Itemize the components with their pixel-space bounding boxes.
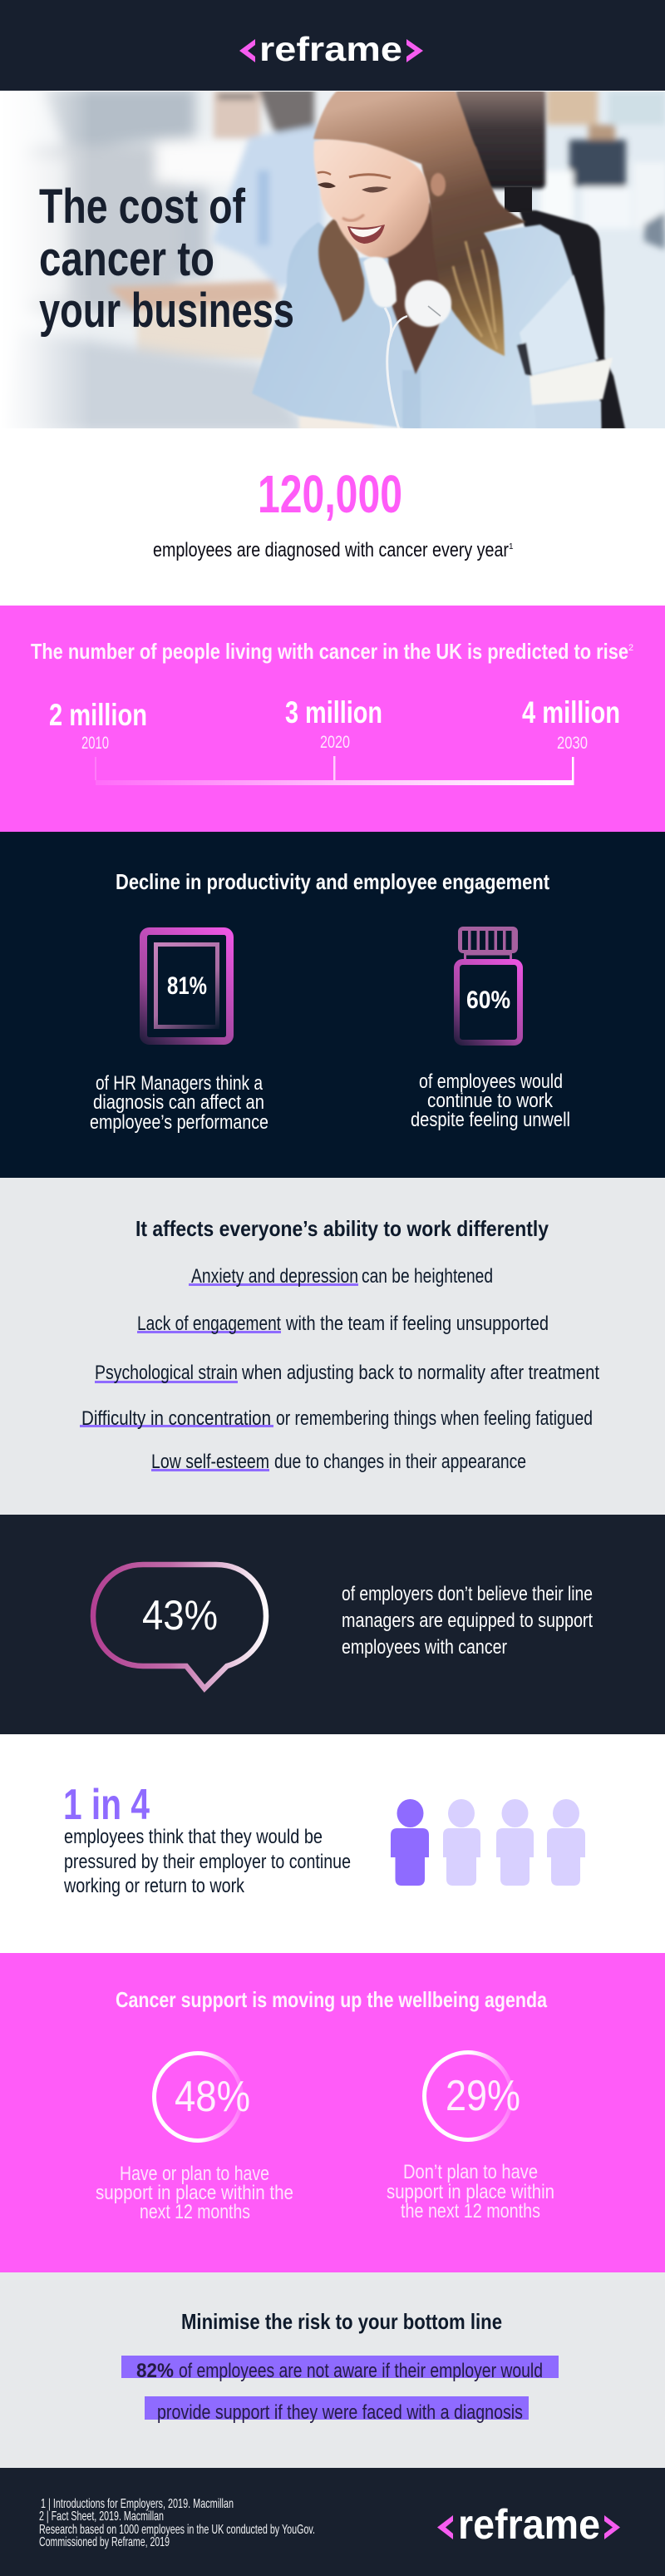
heading: Cancer support is moving up the wellbeing agenda: [116, 1987, 547, 2012]
logo: reframe: reframe: [458, 2501, 600, 2548]
headphones and cable: [363, 257, 451, 429]
hair: [313, 90, 526, 356]
value labels: 4 million: [522, 695, 620, 729]
panel: decline in productivity: [0, 832, 665, 1178]
text: don't plan: support in place within: [387, 2181, 554, 2203]
logo: reframe: [239, 30, 423, 68]
footnotes: Commissioned by Reframe, 2019: [39, 2535, 170, 2549]
text: have or plan: support in place within the: [96, 2182, 293, 2204]
shirt placket: [402, 370, 421, 430]
footnotes: Research based on 1000 employees in the UK conducted by YouGov.: [39, 2523, 315, 2537]
value labels: [49, 695, 620, 732]
office chair: [455, 88, 625, 429]
header bar with logo: [0, 0, 665, 91]
background office: blurred colleagues, desk and monitor: [0, 87, 665, 433]
panel: wellbeing agenda: [0, 1953, 665, 2272]
text: HR managers: employee’s performance: [90, 1111, 268, 1134]
list item: strain: [95, 1362, 599, 1384]
footer: [0, 2468, 665, 2576]
logo: reframe: reframe: [259, 30, 402, 68]
text: employers: of employers don’t believe their line: [342, 1583, 593, 1605]
hair highlight strands: [453, 241, 497, 349]
big stat: 1 in 4: [63, 1781, 150, 1829]
icon: speech bubble 43%: [93, 1565, 266, 1688]
text: have or plan: Have or plan to have: [120, 2163, 269, 2185]
text: have or plan: next 12 months: [140, 2201, 250, 2223]
hero title: The cost of: [39, 180, 246, 234]
text: have or plan: [96, 2163, 293, 2223]
ring chart: 29%: 29%: [446, 2072, 520, 2120]
shirt sleeve and cuff: [517, 274, 613, 429]
list item: anxiety: Anxiety and depression: [191, 1265, 358, 1288]
footnotes: 1 | Introductions for Employers, 2019. Macmillan: [41, 2497, 234, 2511]
text: employees: of employees would: [419, 1070, 563, 1093]
stat description: employees are diagnosed with cancer every year: [153, 539, 509, 561]
heading: Decline in productivity and employee engagement: [116, 869, 549, 894]
panel: ability to work: [0, 1178, 665, 1515]
year labels: 2020: [320, 733, 350, 752]
timeline bar: [95, 756, 574, 785]
icon: speech bubble 43%: 43%: [142, 1592, 218, 1639]
left white fade: [0, 91, 82, 428]
description: working or return to work: [63, 1875, 245, 1897]
highlight line 1: [121, 2356, 559, 2382]
big number: 120,000: [258, 464, 402, 524]
text: HR managers: [90, 1072, 268, 1134]
list item: strain: when adjusting back to normality after treatment: [241, 1362, 599, 1384]
highlight line 2: provide support if they were faced with a diagnosis: [157, 2401, 523, 2424]
panel: 1 in 4: [0, 1734, 665, 1953]
panel: minimise the risk: [0, 2272, 665, 2468]
eyes, nose and smile: [318, 172, 391, 244]
list item: anxiety: [189, 1265, 493, 1288]
list item: engagement: Lack of engagement: [137, 1313, 281, 1335]
heading: It affects everyone’s ability to work differently: [135, 1216, 549, 1241]
text: don't plan: Don’t plan to have: [403, 2161, 538, 2183]
year labels: 2010: [81, 734, 109, 753]
description: employees think that they would be: [64, 1826, 323, 1848]
face: [313, 140, 430, 259]
hero photo: smiling woman at office desk: [0, 87, 665, 433]
icon: pill bottle 60%: 60%: [466, 986, 510, 1014]
panel: people living with cancer timeline: [0, 606, 665, 832]
panel: line managers: [0, 1515, 665, 1734]
list item: self-esteem: [151, 1451, 526, 1473]
footnotes: [39, 2497, 315, 2549]
text: employees: despite feeling unwell: [411, 1109, 570, 1131]
list item: self-esteem: due to changes in their appearance: [274, 1451, 526, 1473]
woman's shirt: [252, 222, 601, 429]
ear: [431, 173, 446, 196]
list item: self-esteem: Low self-esteem: [151, 1451, 269, 1473]
ring chart: 48%: [155, 2053, 250, 2141]
text: HR managers: of HR Managers think a: [96, 1072, 264, 1095]
icon: document frame 81%: [143, 932, 229, 1041]
list item: concentration: [80, 1407, 593, 1430]
list item: concentration: Difficulty in concentration: [81, 1407, 271, 1430]
text: don't plan: [387, 2161, 554, 2222]
highlight line 1: 82%: [136, 2360, 174, 2382]
list item: strain: Psychological strain: [95, 1362, 238, 1384]
text: employers: managers are equipped to support: [342, 1609, 593, 1632]
heading: 2: [628, 643, 633, 653]
list item: engagement: [137, 1313, 549, 1335]
hero title: your business: [39, 284, 294, 338]
hero title: [39, 180, 294, 338]
text: employers: employees with cancer: [342, 1636, 507, 1659]
chest and neck: [384, 201, 441, 375]
stat description: 1: [509, 542, 514, 551]
footnotes: 2 | Fact Sheet, 2019. Macmillan: [39, 2509, 164, 2524]
text: employers: [342, 1583, 593, 1659]
list item: anxiety: can be heightened: [362, 1265, 493, 1288]
text: HR managers: diagnosis can affect an: [93, 1091, 264, 1114]
year labels: 2030: [557, 734, 588, 753]
text: don't plan: the next 12 months: [401, 2200, 540, 2222]
description: pressured by their employer to continue: [64, 1851, 351, 1873]
text: employees: [411, 1070, 570, 1131]
icon: four people: [391, 1799, 585, 1886]
icon: document frame 81%: 81%: [167, 972, 207, 1000]
left lock of hair: [318, 218, 364, 322]
year labels: [81, 733, 588, 753]
highlight line 2: [145, 2396, 529, 2424]
list item: engagement: with the team if feeling unsupported: [285, 1313, 549, 1335]
panel: 120,000 employees stat: [0, 429, 665, 606]
description: [63, 1826, 351, 1897]
text: employees: continue to work: [427, 1090, 554, 1112]
ring chart: 48%: 48%: [175, 2073, 250, 2121]
value labels: 2 million: [49, 698, 147, 732]
value labels: 3 million: [285, 695, 382, 729]
list item: concentration: or remembering things when feeling fatigued: [276, 1407, 593, 1430]
highlight line 1: of employees are not aware if their employer would: [179, 2360, 543, 2382]
ring chart: 29%: [424, 2053, 520, 2139]
hero title: cancer to: [39, 232, 214, 286]
icon: pill bottle 60%: [457, 927, 520, 1043]
heading: Minimise the risk to your bottom line: [181, 2309, 502, 2334]
